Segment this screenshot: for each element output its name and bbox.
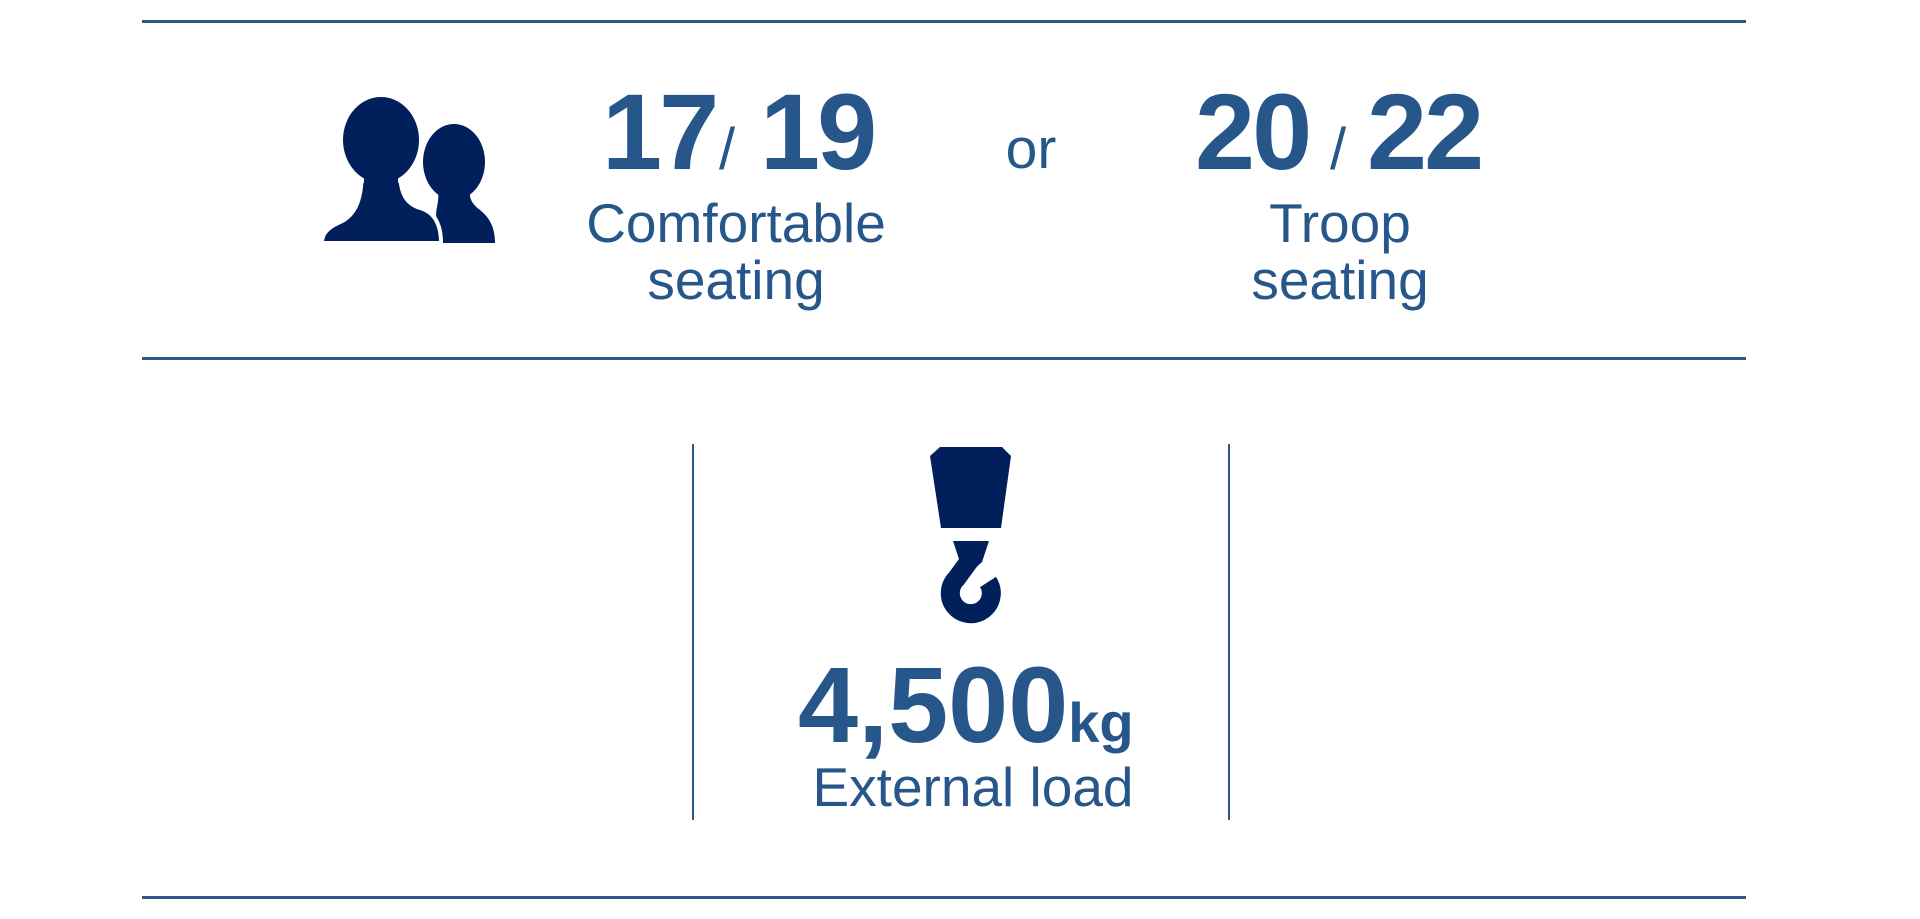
text: / [719, 117, 735, 182]
text: or: or [1006, 117, 1056, 181]
label: comfortable seating: Comfortable [586, 192, 886, 254]
label: comfortable seating: seating [647, 249, 825, 311]
icon: crane hook [930, 447, 1011, 624]
icon: people [324, 97, 495, 243]
number: 4,500kg: 4,500kg [798, 644, 1134, 765]
text: 20 [1195, 71, 1309, 192]
number: 20/22 [1195, 71, 1481, 192]
label: troop seating: Troop [1269, 192, 1411, 254]
text: 22 [1367, 71, 1481, 192]
label: troop seating: seating [1251, 249, 1429, 311]
text: 17 [602, 71, 716, 192]
number: 17/19 [602, 71, 874, 192]
text: / [1330, 117, 1346, 182]
label: troop seating [1251, 192, 1429, 311]
label: external load: External load [812, 756, 1134, 818]
label: comfortable seating [586, 192, 886, 311]
text: 19 [760, 71, 874, 192]
